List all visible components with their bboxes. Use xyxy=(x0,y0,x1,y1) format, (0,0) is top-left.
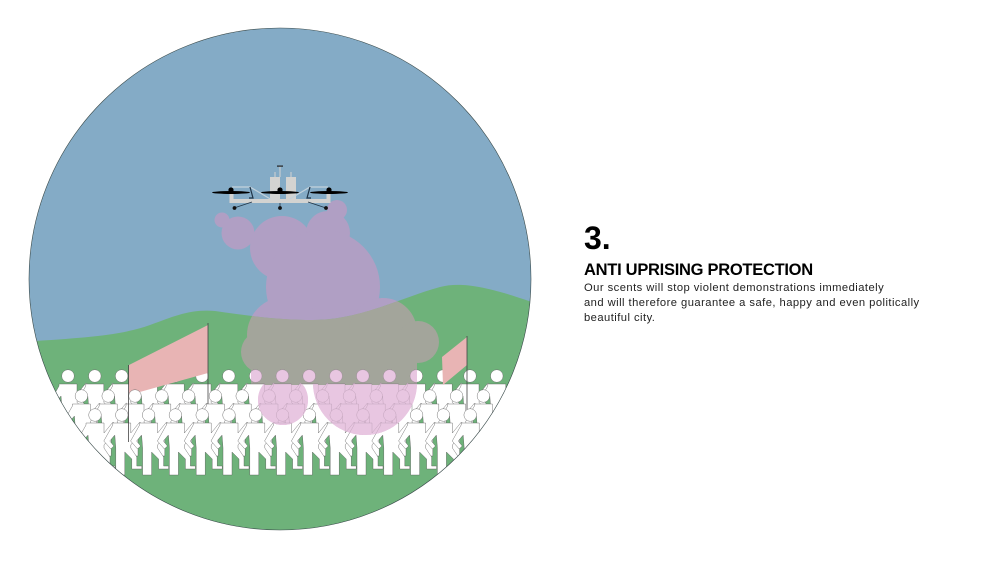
body text: Our scents will stop violent demonstrations immediately xyxy=(584,282,884,294)
body text: beautiful city. xyxy=(584,312,655,324)
pink mist behind the gaps xyxy=(258,385,417,435)
left banner pole xyxy=(128,365,129,442)
body text xyxy=(584,282,920,324)
middle row of demonstrators xyxy=(63,390,506,456)
right banner xyxy=(442,336,467,413)
left banner xyxy=(129,323,208,405)
sky xyxy=(20,20,540,540)
illustration: circular scene xyxy=(28,28,532,530)
drone xyxy=(212,166,348,210)
green hills xyxy=(20,285,540,540)
back row of demonstrators xyxy=(56,369,506,423)
body text: and will therefore guarantee a safe, happy and even politically xyxy=(584,297,920,309)
pink mist on the crowd xyxy=(251,370,417,435)
step number: 3. xyxy=(584,220,611,256)
scent cloud over hills xyxy=(241,302,439,385)
disc outline xyxy=(29,28,531,530)
front row of demonstrators xyxy=(77,409,493,475)
heading: ANTI UPRISING PROTECTION xyxy=(584,261,813,279)
scent cloud over sky xyxy=(214,200,398,320)
